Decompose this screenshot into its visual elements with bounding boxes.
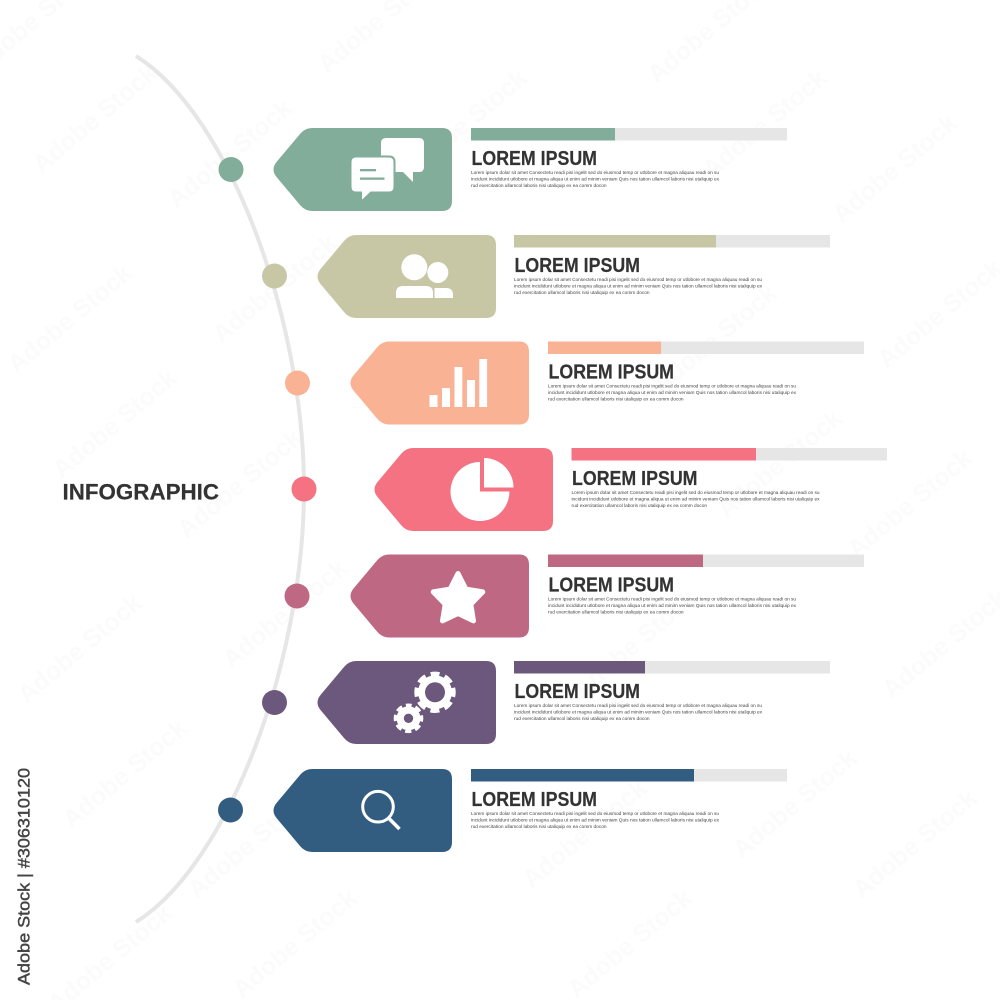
row 2 text block: Lorem ipsum dolar sit amet Consectetu readi pisi ingelit sed do eiusmod temp or utlobore et magna aliquau readi on su	[514, 277, 762, 283]
row 7 text block: LOREM IPSUM	[472, 788, 597, 811]
tag 4: coral	[374, 448, 553, 531]
row 1 text block: incidunt incididunt utlobore et magna aliqua ut enim ad minim veniam Quis nos tation ullamcol laboris nisi utaliquip ex	[471, 177, 720, 183]
background watermark: Adobe Stock	[182, 784, 317, 904]
background watermark: Adobe Stock	[12, 589, 147, 709]
row 4 text block: Lorem ipsum dolar sit amet Consectetu readi pisi ingelit sed do eiusmod temp or utlobore et magna aliquau readi on su	[572, 490, 820, 496]
background watermark: Adobe Stock	[217, 554, 352, 674]
icon: magnifier	[363, 791, 400, 829]
background watermark: Adobe Stock	[517, 774, 652, 894]
tag 6: purple	[318, 661, 496, 744]
row 4 text block: rud exercitation ullamcol laboris nisi utaliquip ex ea comm docon	[572, 503, 707, 509]
icon: star	[433, 574, 483, 621]
row 4 text block: LOREM IPSUM	[572, 467, 698, 490]
row 6 text block: incidunt incididunt utlobore et magna aliqua ut enim ad minim veniam Quis nos tation ullamcol laboris nisi utaliquip ex	[514, 710, 763, 716]
row 7 text block: Lorem ipsum dolar sit amet Consectetu readi pisi ingelit sed do eiusmod temp or utlobore et magna aliquau readi on su	[471, 811, 719, 817]
timeline dot 4	[292, 476, 316, 502]
row 1 text block: Lorem ipsum dolar sit amet Consectetu readi pisi ingelit sed do eiusmod temp or utlobore et magna aliquau readi on su	[471, 170, 719, 176]
row 4 text block: incidunt incididunt utlobore et magna aliqua ut enim ad minim veniam Quis nos tation ullamcol laboris nisi utaliquip ex	[572, 497, 820, 503]
background watermark: Adobe Stock	[727, 744, 862, 864]
row 4 text block	[572, 448, 887, 509]
background watermark: Adobe Stock	[647, 279, 782, 399]
row 6 text block: Lorem ipsum dolar sit amet Consectetu readi pisi ingelit sed do eiusmod temp or utlobore et magna aliquau readi on su	[514, 703, 762, 709]
background watermark: Adobe Stock	[842, 444, 977, 564]
row 1 text block: LOREM IPSUM	[472, 147, 597, 170]
tag 3: peach	[350, 342, 529, 424]
tag 2: khaki	[318, 235, 496, 318]
timeline dot 6	[262, 690, 287, 715]
row 5 text block: rud exercitation ullamcol laboris nisi utaliquip ex ea comm docon	[548, 610, 684, 616]
background watermark: Adobe Stock	[47, 364, 182, 484]
row 5 text block: LOREM IPSUM	[548, 574, 674, 596]
timeline dot 2	[262, 264, 287, 288]
row 3 text block: LOREM IPSUM	[548, 360, 674, 384]
icon: pie chart	[450, 458, 514, 521]
row 5 text block: incidunt incididunt utlobore et magna aliqua ut enim ad minim veniam Quis nos tation ullamcol laboris nisi utaliquip ex	[548, 603, 797, 609]
timeline arc	[136, 56, 304, 922]
row 7 text block: rud exercitation ullamcol laboris nisi utaliquip ex ea comm docon	[471, 824, 607, 830]
row 2 text block: LOREM IPSUM	[514, 254, 640, 277]
background watermark: Adobe Stock	[827, 109, 962, 229]
row 5 text block	[548, 554, 864, 616]
row 6 text block: LOREM IPSUM	[514, 680, 640, 703]
stock credit: Adobe Stock | #306310120	[14, 768, 34, 985]
background watermark: Adobe Stock	[847, 784, 982, 904]
row 2 text block	[514, 235, 830, 296]
background watermark: Adobe Stock	[57, 714, 192, 834]
background watermark: Adobe Stock	[697, 64, 832, 184]
icon: bar chart	[430, 359, 487, 407]
background watermark: Adobe Stock	[207, 229, 342, 349]
row 7 text block	[471, 769, 787, 830]
row 7 text block: incidunt incididunt utlobore et magna aliqua ut enim ad minim veniam Quis nos tation ullamcol laboris nisi utaliquip ex	[471, 818, 720, 824]
timeline dot 3	[285, 370, 310, 396]
tag 1: green	[274, 128, 452, 211]
background watermark: Adobe Stock	[712, 404, 847, 524]
row 2 text block: rud exercitation ullamcol laboris nisi utaliquip ex ea comm docon	[514, 290, 650, 296]
row 5 text block: Lorem ipsum dolar sit amet Consectetu readi pisi ingelit sed do eiusmod temp or utlobore et magna aliquau readi on su	[548, 596, 796, 602]
timeline dot 1	[218, 157, 244, 182]
background watermark: Adobe Stock	[172, 424, 307, 544]
row 3 text block: rud exercitation ullamcol laboris nisi utaliquip ex ea comm docon	[548, 396, 684, 402]
row 6 text block: rud exercitation ullamcol laboris nisi utaliquip ex ea comm docon	[514, 716, 650, 722]
row 6 text block	[514, 661, 830, 722]
icon: people	[396, 254, 453, 298]
row 3 text block: Lorem ipsum dolar sit amet Consectetu readi pisi ingelit sed do eiusmod temp or utlobore et magna aliquau readi on su	[548, 384, 796, 390]
row 3 text block	[548, 342, 864, 402]
background watermark: Adobe Stock	[27, 59, 162, 179]
timeline dot 5	[284, 584, 310, 608]
background watermark: Adobe Stock	[567, 584, 702, 704]
icon: gears	[396, 674, 454, 731]
background watermark: Adobe Stock	[2, 259, 137, 379]
row 1 text block	[471, 128, 787, 189]
background watermark: Adobe Stock	[162, 94, 297, 214]
row 2 text block: incidunt incididunt utlobore et magna aliqua ut enim ad minim veniam Quis nos tation ullamcol laboris nisi utaliquip ex	[514, 284, 763, 290]
row 3 text block: incidunt incididunt utlobore et magna aliqua ut enim ad minim veniam Quis nos tation ullamcol laboris nisi utaliquip ex	[548, 390, 797, 396]
tag 7: navy	[274, 769, 452, 852]
timeline dot 7	[218, 798, 243, 822]
row 1 text block: rud exercitation ullamcol laboris nisi utaliquip ex ea comm docon	[471, 183, 607, 189]
background watermark: Adobe Stock	[397, 64, 532, 184]
title: INFOGRAPHIC	[62, 480, 219, 504]
icon: chat bubbles	[350, 138, 424, 202]
tag 5: rose	[350, 554, 529, 638]
